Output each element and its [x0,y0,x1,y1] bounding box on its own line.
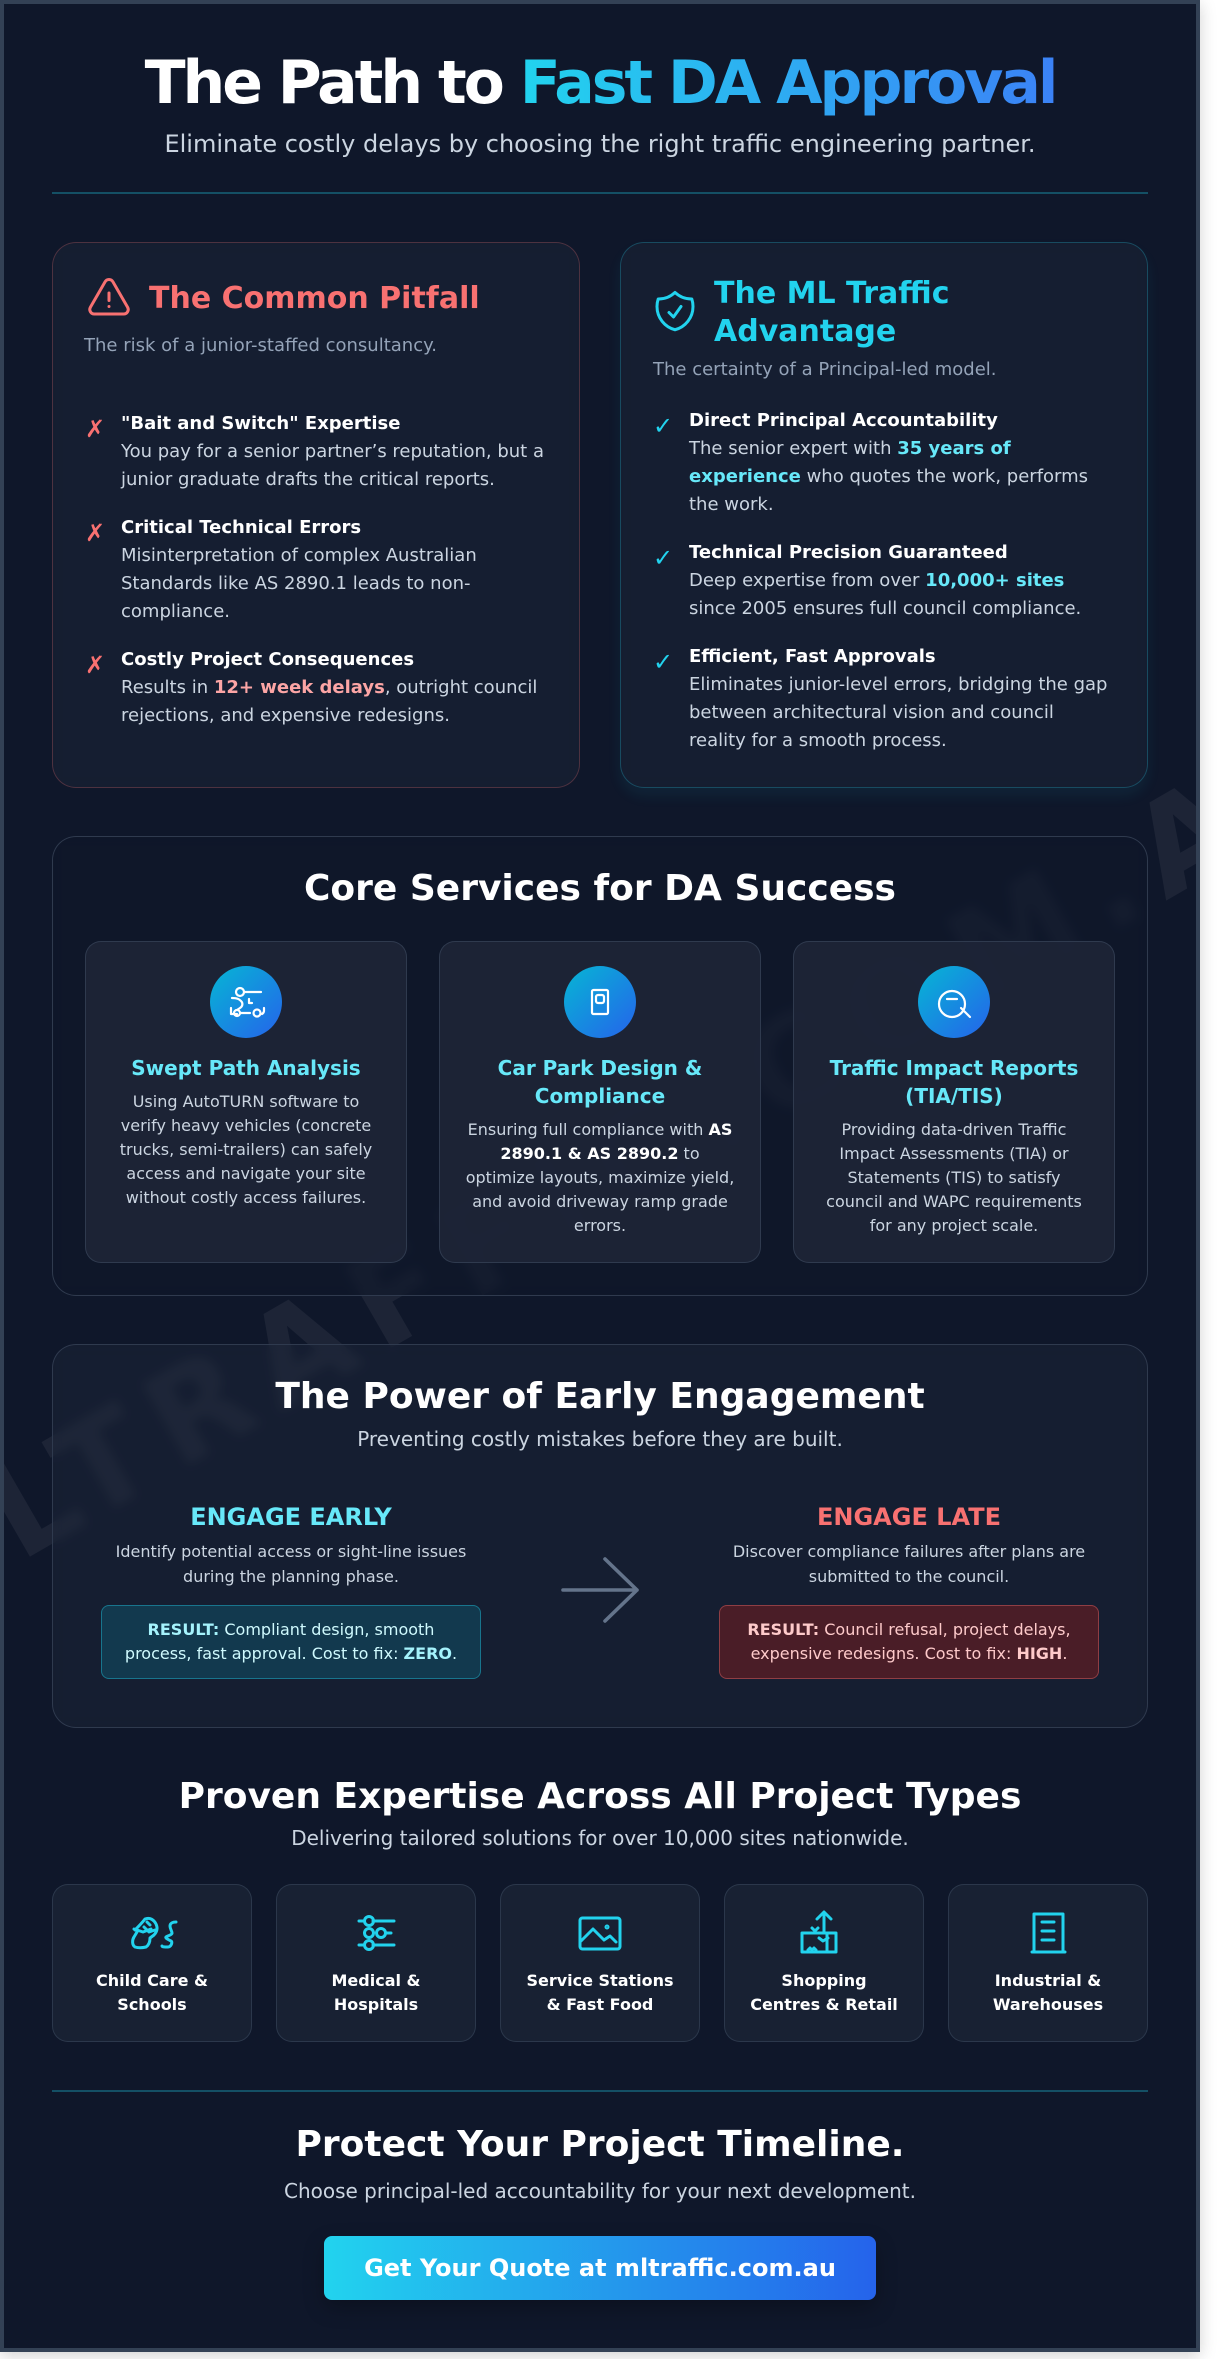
column: engage early [116,1503,466,1586]
pitfall item: bait and switch: You pay for a senior partner’s reputation, but a [121,441,544,462]
label: Industrial & [995,1971,1101,1990]
lead text: The risk of a junior-staffed consultancy. [84,335,437,356]
label: engage late: ENGAGE LATE [817,1503,1001,1531]
icon: picture frame [578,1916,622,1950]
advantage item: technical precision: ✓ [653,544,673,572]
advantage item: fast approvals: reality for a smooth process. [689,730,947,751]
icon: warning triangle [88,278,130,316]
heading: core services: Core Services for DA Success [304,868,896,909]
pitfall item: bait and switch: junior graduate drafts the critical reports. [121,469,495,490]
service text: Using AutoTURN software to [133,1092,359,1111]
heading: proven expertise: Proven Expertise Across All Project Types [179,1776,1021,1817]
label [96,1971,208,2014]
service text: Car Park Design & [498,1056,702,1080]
panel: the common pitfall [52,242,580,788]
pitfall item: project consequences: Results in 12+ week delays, outright council [121,677,537,698]
advantage item: technical precision: Technical Precision Guaranteed [689,542,1008,563]
service text: Impact Assessments (TIA) or [839,1144,1069,1163]
description: Identify potential access or sight-line issues [116,1542,466,1561]
heading: early engagement: The Power of Early Engagement [275,1376,925,1417]
label: Service Stations [526,1971,674,1990]
pitfall item: technical errors: ✗ [85,519,105,547]
label [993,1971,1103,2014]
advantage item: fast approvals: between architectural vision and council [689,702,1054,723]
service text: verify heavy vehicles (concrete [121,1116,371,1135]
arrow [561,1557,639,1623]
advantage item: fast approvals: Efficient, Fast Approvals [689,646,936,667]
label: engage early: ENGAGE EARLY [190,1503,392,1531]
pitfall item: technical errors: Standards like AS 2890.1 leads to non- [121,573,470,594]
service text: access and navigate your site [126,1164,366,1183]
title: The Path to Fast DA Approval [145,48,1055,118]
advantage item: technical precision: Deep expertise from over 10,000+ sites [689,570,1064,591]
subtitle: Eliminate costly delays by choosing the right traffic engineering partner. [164,130,1036,158]
service card: car park [439,941,761,1263]
service text: and avoid driveway ramp grade [472,1192,728,1211]
service text: Statements (TIS) to satisfy [848,1168,1060,1187]
description [733,1542,1085,1586]
result box: early [101,1605,481,1679]
service text: Ensuring full compliance with AS [468,1120,732,1139]
service card: swept path [85,941,407,1263]
pitfall item: project consequences [85,649,537,726]
advantage item: fast approvals: Eliminates junior-level errors, bridging the gap [689,674,1107,695]
advantage item: technical precision [653,542,1081,619]
advantage item: fast approvals [653,646,1107,751]
cta button [324,2236,876,2300]
result box: early: RESULT: Compliant design, smooth [148,1620,434,1639]
service text [826,1056,1082,1235]
advantage item: principal accountability: ✓ [653,412,673,440]
pitfall item: bait and switch [85,413,544,490]
icon: shopping box [800,1910,838,1954]
panel: the ml traffic advantage [620,242,1148,788]
pitfall item: technical errors [85,517,477,622]
label [526,1971,674,2014]
service text: for any project scale. [870,1216,1038,1235]
advantage item: technical precision: since 2005 ensures full council compliance. [689,598,1081,619]
icon: child care [131,1916,178,1950]
panel: early engagement [52,1344,1148,1728]
heading: ml traffic advantage: The ML Traffic [714,276,949,311]
pitfall item: technical errors: compliance. [121,601,230,622]
pitfall item: project consequences: Costly Project Consequences [121,649,414,670]
project card: industrial [948,1884,1148,2042]
label: Hospitals [334,1995,418,2014]
service text: (TIA/TIS) [905,1084,1003,1108]
result box: early: process, fast approval. Cost to fix: ZERO. [125,1644,457,1663]
service text: errors. [574,1216,626,1235]
panel: core services [52,836,1148,1296]
pitfall item: bait and switch: ✗ [85,415,105,443]
icon: shield check [656,290,694,332]
description: submitted to the council. [809,1566,1009,1586]
label [332,1971,420,2014]
cta button: Get Your Quote at mltraffic.com.au [364,2254,836,2282]
label: Centres & Retail [750,1995,898,2014]
label: Schools [117,1995,187,2014]
project card: child care [52,1884,252,2042]
icon: swept path [210,966,282,1038]
pitfall item: project consequences: ✗ [85,651,105,679]
label: & Fast Food [547,1995,653,2014]
cta heading: Protect Your Project Timeline. [296,2124,904,2165]
lead text: The certainty of a Principal-led model. [653,359,997,380]
pitfall item: project consequences: rejections, and expensive redesigns. [121,705,450,726]
description [116,1542,466,1586]
result box: late: RESULT: Council refusal, project delays, [747,1620,1071,1639]
result box: late [719,1605,1099,1679]
service text: optimize layouts, maximize yield, [466,1168,734,1187]
advantage item: principal accountability: The senior expert with 35 years of [689,438,1011,459]
project card: shopping [724,1884,924,2042]
service text: trucks, semi-trailers) can safely [120,1140,372,1159]
advantage item: fast approvals: ✓ [653,648,673,676]
subheading: Delivering tailored solutions for over 10,000 sites nationwide. [291,1826,909,1850]
advantage item: principal accountability: the work. [689,494,774,515]
service text: Compliance [535,1084,665,1108]
label: Child Care & [96,1971,208,1990]
pitfall item: technical errors: Critical Technical Errors [121,517,361,538]
description: Discover compliance failures after plans are [733,1542,1085,1561]
label [750,1971,898,2014]
icon: magnifier [918,966,990,1038]
subheading: Preventing costly mistakes before they are built. [357,1427,843,1451]
icon: warehouse [1030,1912,1066,1954]
heading: ml traffic advantage: Advantage [714,314,896,348]
icon: medical sliders [358,1915,396,1951]
label: Warehouses [993,1995,1103,2014]
pitfall item: bait and switch: "Bait and Switch" Expertise [121,413,400,434]
project card: medical [276,1884,476,2042]
service text: Traffic Impact Reports [830,1056,1078,1080]
column: engage late [733,1503,1085,1586]
service text: Providing data-driven Traffic [842,1120,1066,1139]
service card: traffic impact reports [793,941,1115,1263]
icon: car park [564,966,636,1038]
service text [120,1056,372,1207]
service text: 2890.1 & AS 2890.2 to [500,1144,700,1163]
label: Shopping [781,1971,867,1990]
service text: Swept Path Analysis [131,1056,361,1080]
result box: late: expensive redesigns. Cost to fix: HIGH. [751,1644,1067,1663]
advantage item: principal accountability [653,410,1088,515]
label: Medical & [332,1971,420,1990]
service text: council and WAPC requirements [826,1192,1082,1211]
advantage item: principal accountability: experience who quotes the work, performs [689,466,1088,487]
heading: the common pitfall: The Common Pitfall [149,281,480,316]
project card: service stations [500,1884,700,2042]
service text [466,1056,734,1235]
advantage item: principal accountability: Direct Principal Accountability [689,410,998,431]
pitfall item: technical errors: Misinterpretation of complex Australian [121,545,477,566]
cta subheading: Choose principal-led accountability for your next development. [284,2179,916,2203]
description: during the planning phase. [183,1566,399,1586]
service text: without costly access failures. [126,1188,366,1207]
heading: ml traffic advantage [714,276,949,348]
